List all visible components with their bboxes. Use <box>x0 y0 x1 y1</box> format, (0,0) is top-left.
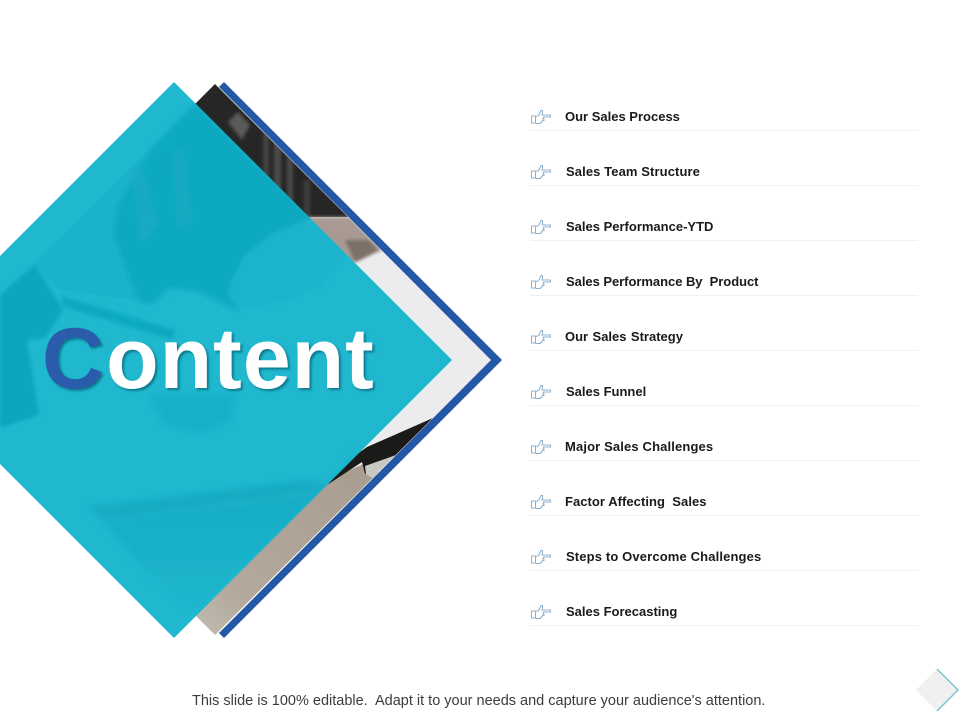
item 10 <box>530 595 918 626</box>
cyan translucent diamond <box>0 82 452 638</box>
item 8 <box>530 485 918 516</box>
title: Content: Content <box>42 311 375 407</box>
item 9: Steps to Overcome Challenges <box>566 549 761 564</box>
item 7: Major Sales Challenges <box>565 439 713 454</box>
item 3 <box>530 210 918 241</box>
item 8: Factor Affecting Sales <box>565 494 707 509</box>
item 10: Sales Forecasting <box>566 604 677 619</box>
corner navigation diamond <box>916 668 959 712</box>
agenda list <box>530 109 918 626</box>
item 9 <box>530 540 918 571</box>
item 2 <box>530 155 918 186</box>
footer note: This slide is 100% editable. Adapt it to your needs and capture your audience's attention. <box>192 693 765 709</box>
diamond graphic with photo <box>0 82 502 638</box>
item 4: Sales Performance By Product <box>566 274 758 289</box>
item 3: Sales Performance-YTD <box>566 219 713 234</box>
item 1: Our Sales Process <box>565 109 680 124</box>
item 5: Our Sales Strategy <box>565 329 683 344</box>
item 5 <box>530 320 918 351</box>
item 6: Sales Funnel <box>566 384 646 399</box>
item 2: Sales Team Structure <box>566 164 700 179</box>
item 6 <box>530 375 918 406</box>
photo strip behind the overlay <box>196 84 490 635</box>
item 1 <box>530 100 918 131</box>
blue chevron frame <box>219 82 502 638</box>
item 4 <box>530 265 918 296</box>
item 7 <box>530 430 918 461</box>
